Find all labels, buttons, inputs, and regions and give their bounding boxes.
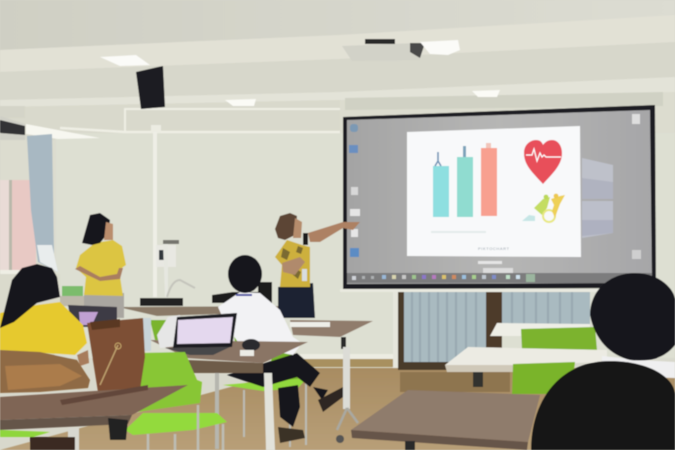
cable trunking [60, 109, 340, 297]
plastic bag and bottle [143, 315, 180, 351]
green chairs [150, 320, 307, 447]
leather bags [0, 318, 145, 393]
volume popup [478, 261, 513, 273]
heart icon on slide [524, 140, 562, 184]
speaker [136, 66, 165, 109]
audience member head bottom [531, 361, 675, 450]
slide legend [431, 231, 486, 233]
desktop icons [349, 114, 641, 259]
presenter in yellow polo [75, 213, 126, 318]
right background desks with chairs [351, 323, 607, 450]
presenter table at back [60, 282, 307, 316]
woman in yellow seated at left [0, 264, 117, 366]
ceiling lights [100, 55, 500, 106]
audience member head right [590, 273, 675, 378]
back wall [55, 133, 675, 358]
middle desk with laptop [143, 313, 308, 450]
seated man in white shirt [218, 255, 343, 443]
presenter pointing [275, 213, 360, 318]
taskbar [347, 273, 652, 283]
lectern stand with lamps [156, 240, 195, 297]
triathlon icon on slide [522, 194, 565, 222]
laptop [165, 313, 237, 355]
curtains below screen [398, 292, 590, 370]
projection screen [340, 105, 656, 292]
bar chart on slide [433, 143, 497, 217]
near green chair [0, 352, 227, 450]
skirting and floor [0, 292, 675, 450]
slide brand: PIKTOCHART [478, 246, 510, 251]
projector [342, 39, 460, 61]
front left desk [0, 385, 188, 450]
projected slide [407, 126, 581, 257]
ceiling and beams [0, 0, 675, 135]
right table at back [290, 320, 373, 443]
window and air conditioner [0, 106, 100, 314]
windows logo on desktop [582, 158, 613, 238]
